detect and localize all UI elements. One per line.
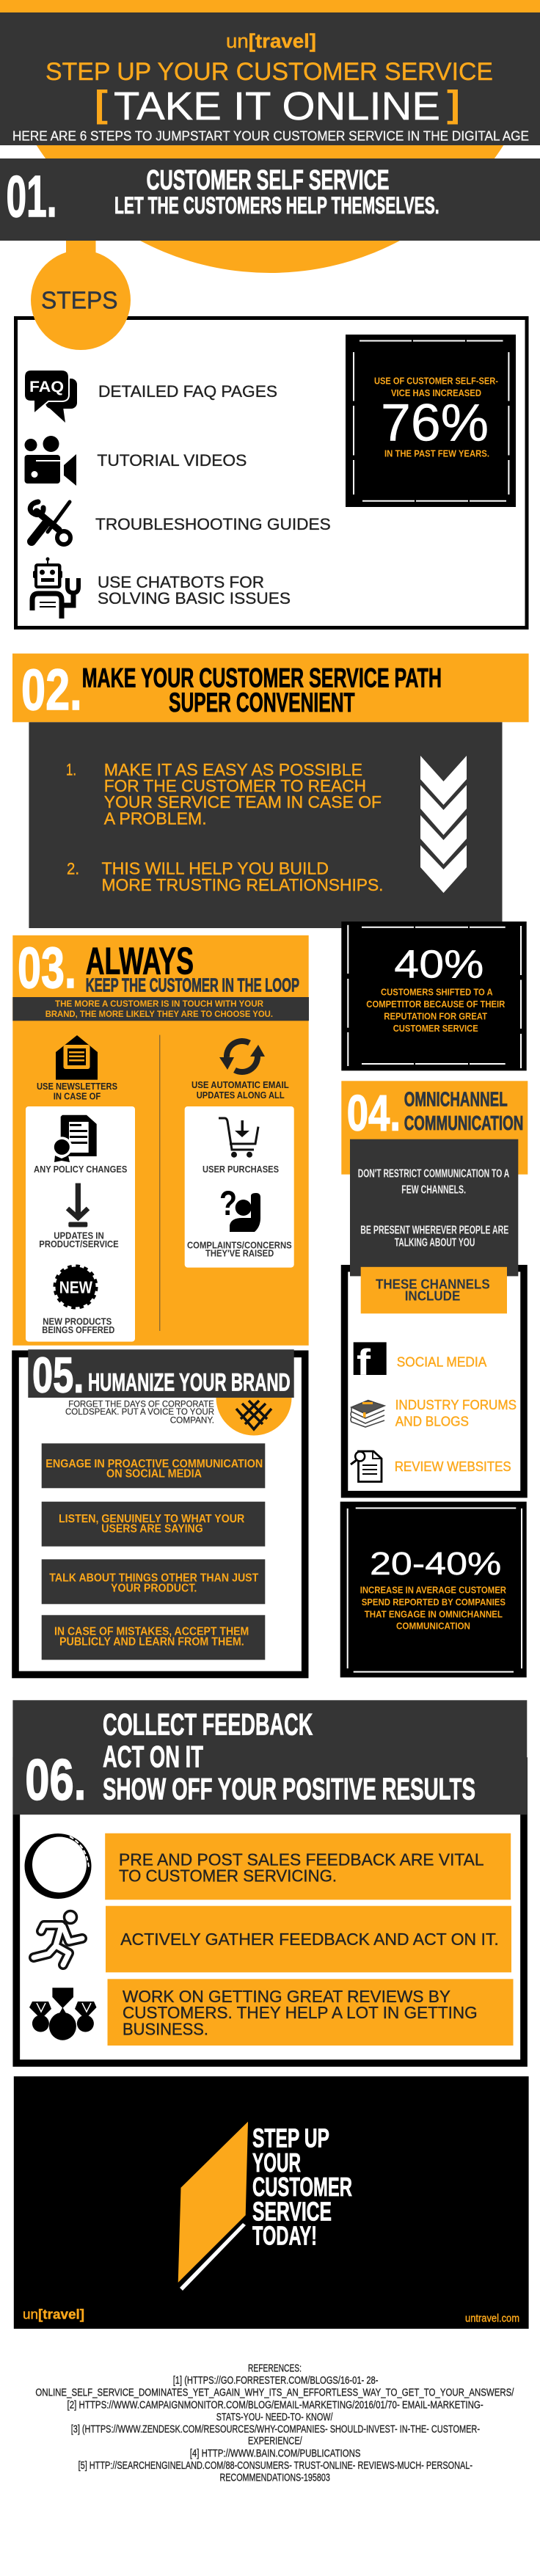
main title: STEP UP YOUR CUSTOMER SERVICE (45, 58, 493, 86)
step text: chatbots: SOLVING BASIC ISSUES (98, 589, 291, 607)
panel: section 04 content (350, 1139, 518, 1276)
step text: chatbots (98, 573, 291, 607)
number 06: 06. (25, 1747, 86, 1812)
section 03 intro strip: THE MORE A CUSTOMER IS IN TOUCH WITH YOUR (55, 999, 263, 1009)
graphic: white slash (180, 2223, 246, 2291)
stat card: 20-40%: 20-40% (370, 1546, 501, 1582)
closing message: TODAY! (252, 2220, 317, 2250)
tip: proactive communication (42, 1443, 265, 1488)
icon: document with magnifier (351, 1451, 382, 1482)
automatic email label (191, 1080, 289, 1101)
section 06 header (12, 1700, 527, 1814)
section 03 heading: ALWAYS (86, 941, 194, 983)
feedback point 1: PRE AND POST SALES FEEDBACK ARE VITAL (119, 1850, 484, 1869)
stat card: 20-40%: SPEND REPORTED BY COMPANIES (362, 1597, 506, 1608)
icon: running person (34, 1911, 82, 1965)
orange hero circle (0, 0, 540, 273)
panel: newsletter topics (26, 1106, 135, 1342)
label: user purchases: USER PURCHASES (202, 1164, 279, 1175)
references: RECOMMENDATIONS-195803 (220, 2472, 330, 2484)
section 04 header (341, 1081, 528, 1175)
references: STATS-YOU- NEED-TO- KNOW/ (216, 2411, 333, 2423)
list item 1: A PROBLEM. (104, 809, 207, 828)
list item 2: 2. (67, 860, 79, 878)
tip: listen: LISTEN, GENUINELY TO WHAT YOUR (59, 1513, 244, 1525)
channels heading: THESE CHANNELS (376, 1277, 490, 1292)
tip: accept mistakes: IN CASE OF MISTAKES, ACCEPT THEM (54, 1626, 249, 1638)
stat card: 20-40%: INCREASE IN AVERAGE CUSTOMER (360, 1585, 506, 1595)
icon: FAQ bubbles (24, 370, 77, 423)
list item 1: 1. (66, 761, 76, 779)
icon: new badge (54, 1266, 97, 1307)
label: new products (42, 1316, 114, 1335)
subtitle take it online: TAKE IT ONLINE (114, 84, 440, 128)
section 06 heading: ACT ON IT (103, 1740, 203, 1774)
tip: talk about other things: YOUR PRODUCT. (111, 1583, 197, 1595)
icon: policy document (51, 1115, 97, 1162)
section 05 intro: FORGET THE DAYS OF CORPORATE (68, 1398, 214, 1409)
label: policy changes: ANY POLICY CHANGES (34, 1164, 128, 1175)
icon: medals (29, 1988, 97, 2040)
steps badge: STEPS (41, 287, 117, 314)
stat card: 40%: 40% (394, 943, 484, 987)
step text: FAQ: DETAILED FAQ PAGES (98, 382, 277, 401)
number 04: 04. (347, 1085, 401, 1142)
stat card: 40%: CUSTOMERS SHIFTED TO A (381, 987, 493, 998)
icon: person asking question: ? (219, 1183, 237, 1222)
omnichannel tip 1 (358, 1167, 510, 1196)
icon: facebook: f (357, 1342, 371, 1383)
label: product updates (39, 1230, 119, 1249)
label: complaints: COMPLAINTS/CONCERNS (187, 1241, 292, 1251)
section 03 intro strip: BRAND, THE MORE LIKELY THEY ARE TO CHOOSE YOU. (45, 1009, 273, 1019)
panel: self service steps (16, 241, 527, 628)
newsletter label: IN CASE OF (54, 1092, 101, 1102)
section 02 heading (82, 663, 442, 718)
label: product updates: UPDATES IN (54, 1230, 104, 1241)
section 05 intro: COLDSPEAK. PUT A VOICE TO YOUR (65, 1406, 214, 1417)
stat card: 40% (341, 922, 527, 1070)
closing message (252, 2123, 352, 2250)
stat card: 20-40%: THAT ENGAGE IN OMNICHANNEL (365, 1609, 503, 1619)
section 05 badge circle with heart (216, 1360, 292, 1435)
icon: down chevrons (420, 756, 467, 893)
tip: talk about other things: TALK ABOUT THINGS OTHER THAN JUST (49, 1572, 259, 1585)
icon: person asking question (219, 1183, 260, 1232)
review websites row: REVIEW WEBSITES (395, 1459, 511, 1474)
list item 2: THIS WILL HELP YOU BUILD (101, 859, 329, 878)
list item 1: MAKE IT AS EASY AS POSSIBLE (104, 760, 362, 779)
section 05 heading: HUMANIZE YOUR BRAND (88, 1369, 291, 1397)
step text: troubleshooting guides: TROUBLESHOOTING GUIDES (95, 515, 331, 533)
header band (0, 12, 540, 145)
icon: download arrow (68, 1183, 88, 1227)
section 01 header (0, 158, 540, 241)
stat card: 40%: COMPETITOR BECAUSE OF THEIR (366, 999, 506, 1010)
label: complaints: THEY'VE RAISED (205, 1249, 274, 1259)
icon: tools (30, 502, 70, 544)
section 03 heading (86, 941, 299, 996)
omnichannel tip 2: TALKING ABOUT YOU (395, 1237, 475, 1249)
stat card: 76% (346, 335, 516, 507)
channels heading (361, 1267, 507, 1313)
panel: automatic email topics (185, 1106, 294, 1268)
section 03 panel (12, 935, 309, 1346)
feedback point 3 (107, 1979, 514, 2046)
references: EXPERIENCE/ (248, 2435, 302, 2448)
logo: un[travel] (226, 30, 316, 52)
icon: new badge: NEW (59, 1277, 92, 1296)
feedback point 3: BUSINESS. (123, 2019, 208, 2038)
section 01 heading: CUSTOMER SELF SERVICE (147, 165, 389, 196)
icon: books (351, 1401, 384, 1427)
section 05 header bar (28, 1348, 294, 1404)
label: product updates: PRODUCT/SERVICE (39, 1238, 119, 1249)
stat card: 76%: USE OF CUSTOMER SELF-SER- (374, 376, 498, 387)
newsletter label (37, 1081, 117, 1102)
number 02: 02. (21, 657, 82, 722)
stat card: 76%: 76% (381, 395, 489, 453)
footer logo: un[travel] (23, 2307, 84, 2322)
number 05: 05. (32, 1348, 84, 1404)
tip: proactive communication: ON SOCIAL MEDIA (106, 1467, 202, 1480)
icon: FAQ bubbles: FAQ (29, 379, 64, 395)
section 04 heading (404, 1087, 523, 1134)
channels heading: INCLUDE (405, 1289, 460, 1304)
section 06 heading: COLLECT FEEDBACK (103, 1707, 313, 1741)
feedback point 3: WORK ON GETTING GREAT REVIEWS BY (123, 1987, 450, 2006)
social media row: SOCIAL MEDIA (397, 1355, 486, 1370)
panel: channels frame (345, 1269, 524, 1495)
step text: tutorial videos: TUTORIAL VIDEOS (97, 451, 247, 470)
list item 2: MORE TRUSTING RELATIONSHIPS. (101, 875, 383, 894)
list item 1: FOR THE CUSTOMER TO REACH (104, 776, 366, 795)
closing message: CUSTOMER (252, 2172, 352, 2202)
icon: shopping cart (219, 1118, 258, 1158)
tip: proactive communication: ENGAGE IN PROACTIVE COMMUNICATION (45, 1458, 263, 1470)
social media row (354, 1342, 486, 1383)
section 05 intro: COMPANY. (170, 1415, 214, 1425)
stat card: 20-40%: COMMUNICATION (396, 1621, 470, 1632)
review websites row (351, 1451, 511, 1482)
tip: talk about other things (42, 1559, 265, 1604)
stat card: 76%: VICE HAS INCREASED (391, 387, 481, 398)
icon: robot (32, 558, 79, 619)
feedback point 1 (105, 1834, 511, 1900)
stat card: 20-40% (340, 1502, 527, 1677)
list item 1: YOUR SERVICE TEAM IN CASE OF (104, 792, 382, 811)
section 05 intro (65, 1398, 214, 1425)
icon: newsletter envelope (56, 1035, 98, 1080)
icon: facebook (354, 1342, 387, 1383)
section 06 panel (12, 1700, 527, 2063)
icon: video camera (25, 436, 76, 486)
steps badge (31, 241, 131, 350)
automatic email label: USE AUTOMATIC EMAIL (191, 1080, 289, 1090)
list item 2 (67, 859, 383, 894)
tip: accept mistakes (42, 1615, 265, 1660)
references: [1] (HTTPS://GO.FORRESTER.COM/BLOGS/16-01- 28- (173, 2374, 378, 2387)
label: new products: NEW PRODUCTS (43, 1316, 112, 1327)
omnichannel tip 2 (360, 1225, 509, 1249)
omnichannel tip 1: FEW CHANNELS. (401, 1183, 466, 1196)
icon: refresh arrows (219, 1041, 265, 1072)
graphic: orange parallelogram (178, 2122, 248, 2283)
closing message: STEP UP (252, 2123, 329, 2153)
feedback point 2 (106, 1906, 511, 1972)
icon: brush circle (25, 1834, 91, 1899)
section 03 heading: KEEP THE CUSTOMER IN THE LOOP (86, 974, 299, 996)
tip: listen (42, 1502, 265, 1547)
forums row: AND BLOGS (395, 1414, 469, 1429)
automatic email label: UPDATES ALONG ALL (197, 1090, 285, 1101)
subtitle take it online: [ (95, 83, 108, 125)
section 03 intro strip (12, 997, 309, 1021)
number 01: 01. (6, 164, 57, 229)
closing message: SERVICE (252, 2197, 332, 2227)
feedback point 1: TO CUSTOMER SERVICING. (119, 1867, 337, 1886)
tip: accept mistakes: PUBLICLY AND LEARN FROM THEM. (59, 1636, 244, 1649)
panel: section 02 content (29, 722, 502, 928)
list item 1 (66, 760, 382, 828)
section 06 heading (103, 1707, 475, 1806)
stat card: 40%: CUSTOMER SERVICE (393, 1023, 478, 1034)
references (35, 2362, 514, 2484)
section 02 header (12, 654, 529, 722)
tip: listen: USERS ARE SAYING (101, 1523, 203, 1536)
forums row (351, 1398, 517, 1429)
closing call to action panel (14, 2076, 529, 2329)
section 05 panel (15, 1348, 305, 1674)
footer url: untravel.com (465, 2312, 519, 2324)
stat card: 76%: IN THE PAST FEW YEARS. (384, 448, 489, 459)
newsletter label: USE NEWSLETTERS (37, 1081, 117, 1092)
number 03: 03. (18, 935, 76, 1000)
step text: chatbots: USE CHATBOTS FOR (98, 573, 264, 591)
stat card: 40%: REPUTATION FOR GREAT (384, 1010, 487, 1021)
section 02 heading: SUPER CONVENIENT (169, 687, 355, 718)
label: complaints (187, 1241, 292, 1259)
references: [4] HTTP://WWW.BAIN.COM/PUBLICATIONS (190, 2447, 361, 2459)
label: new products: BEINGS OFFERED (42, 1324, 114, 1335)
forums row: INDUSTRY FORUMS (395, 1398, 517, 1412)
closing message: YOUR (252, 2148, 301, 2178)
feedback point 2: ACTIVELY GATHER FEEDBACK AND ACT ON IT. (120, 1930, 499, 1949)
references: REFERENCES: (248, 2362, 302, 2375)
feedback point 3: CUSTOMERS. THEY HELP A LOT IN GETTING (123, 2003, 478, 2022)
subtitle take it online: ] (447, 83, 460, 125)
